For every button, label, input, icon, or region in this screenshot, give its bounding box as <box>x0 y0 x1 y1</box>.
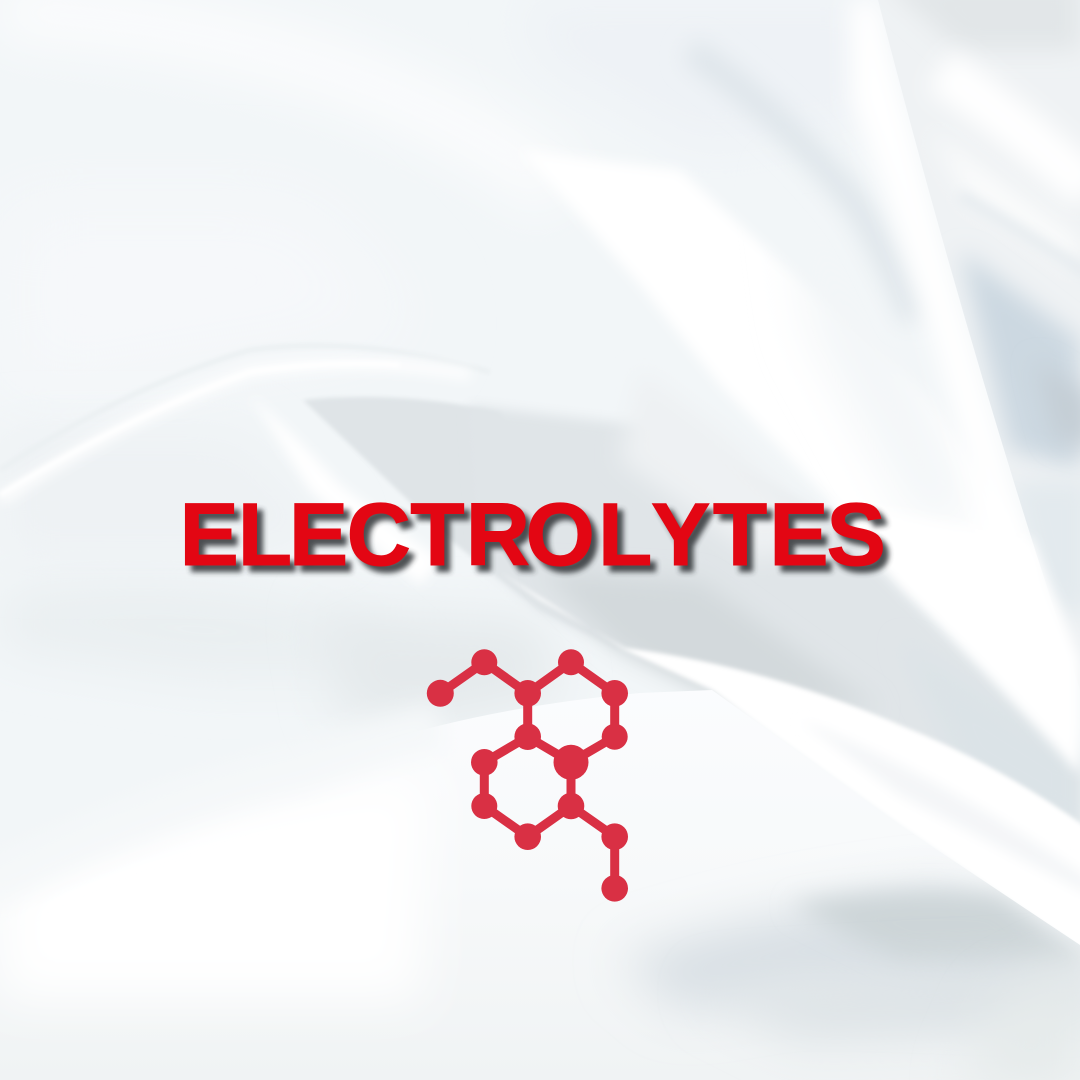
left soft shading <box>0 579 420 680</box>
title: ELECTROLYTES: ELECTROLYTES <box>180 484 886 584</box>
central grey fold <box>303 397 620 650</box>
right panel behind the sharp fold <box>880 0 1080 614</box>
silky strokes, upper left <box>0 346 490 470</box>
title: ELECTROLYTES: ELECTROLYTES <box>186 490 892 590</box>
icon: molecule <box>427 649 628 902</box>
lower hump <box>0 680 1080 1080</box>
white diagonal band <box>520 150 1040 690</box>
soften left hump edge <box>0 725 440 890</box>
white ridge <box>500 572 1080 955</box>
